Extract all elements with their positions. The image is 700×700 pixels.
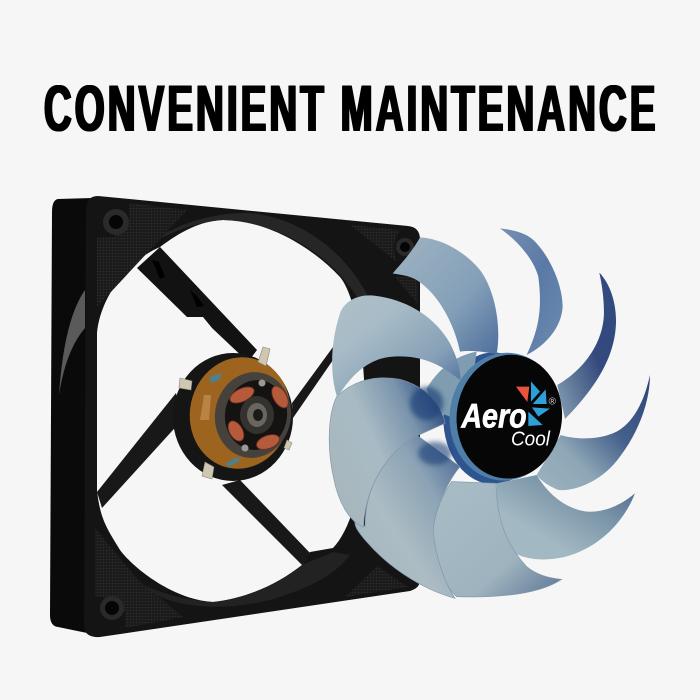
terminals (179, 347, 292, 479)
inner ring bevel (125, 213, 370, 300)
blade: lower left (355, 435, 460, 598)
back frame (50, 198, 92, 634)
blade: left (329, 378, 445, 527)
fan frame (50, 196, 420, 637)
mounting holes (103, 209, 129, 235)
hub base (173, 353, 293, 481)
motor hub (173, 347, 301, 481)
fan impeller (329, 228, 650, 598)
blade: top (393, 237, 498, 354)
logo mark: triangles (516, 381, 550, 426)
hub pale wedge (427, 352, 477, 423)
blade: right (537, 375, 650, 490)
hub rim (443, 347, 567, 486)
corner pads (97, 203, 187, 307)
circuit board (179, 348, 301, 478)
blade: lower right (497, 475, 635, 559)
stator (208, 366, 298, 464)
pins (258, 380, 266, 386)
dark root shadow (410, 387, 443, 420)
blade: slim top (500, 228, 563, 355)
blade: bottom (433, 482, 562, 597)
logo wordmark Aero: Aero (460, 397, 527, 435)
bearing (240, 396, 274, 434)
back frame grey highlight (59, 290, 85, 395)
title: CONVENIENT MAINTENANCE (44, 71, 659, 145)
logo wordmark Cool: Cool (511, 428, 551, 451)
front frame body (84, 196, 420, 637)
blade: top right (557, 273, 616, 419)
blade: upper left (332, 295, 461, 397)
hub back ring (443, 352, 543, 484)
logo disc (450, 349, 568, 484)
copper coils (225, 383, 292, 452)
logo registered mark: ® (549, 397, 557, 408)
struts (137, 247, 257, 362)
